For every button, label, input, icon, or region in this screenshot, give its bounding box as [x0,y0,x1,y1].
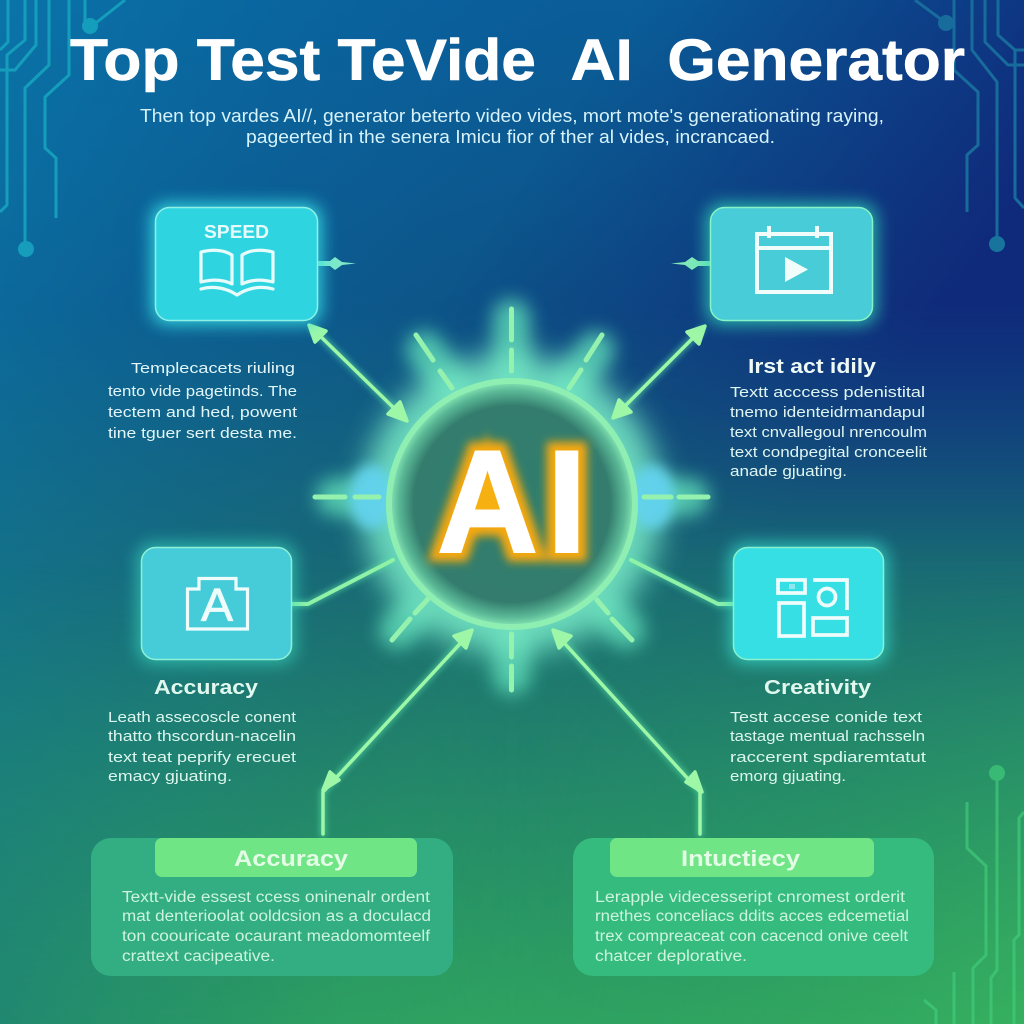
connector: creativity card to hub [631,560,733,604]
text block: accuracy description: emacy gjuating. [108,768,232,785]
circuit traces: top left [0,0,125,257]
label: speed: SPEED [204,222,269,242]
arrow: video to hub [613,326,705,418]
arrow: bottom left box to hub [323,630,472,834]
title: Top Test TeVide AI Generator [70,28,965,93]
text block: video description: text condpegital cronceelit [730,444,928,461]
text block: video description: Textt acccess pdenistital [730,384,925,401]
text block: creativity description [730,709,927,785]
card: speed [151,203,322,325]
heading: instant ability: Irst act idily [748,356,877,378]
panel header: intuitive: Intuctiecy [681,846,801,871]
arrow: speed to hub [309,325,407,421]
icon: framed letter A: A [201,579,233,631]
text block: accuracy description: text teat peprify erecuet [108,749,297,766]
panel header: accuracy [155,838,417,877]
hub outer glow [335,318,690,676]
text block: creativity description: tastage mentual rachsseln [730,728,925,745]
icon: open book [201,250,273,295]
panel text: accuracy: crattext cacipeative. [122,948,275,965]
text block: creativity description: emorg gjuating. [730,768,846,785]
panel text: intuitive: Lerapple videcesseript cnromest orderit [595,889,906,906]
panel text: intuitive: chatcer deplorative. [595,948,747,965]
card: accuracy icon [137,543,296,664]
subtitle: Then top vardes AI//, generator beterto video vides, mort mote's generationating raying, [140,106,884,126]
AI label: I [546,420,587,583]
text block: accuracy description: Leath assecoscle conent [108,709,297,726]
icon: layout blocks [778,580,847,636]
panel text: accuracy: Textt-vide essest ccess oninenalr ordent [122,889,431,906]
arrows and connectors [292,325,733,834]
heading: creativity: Creativity [764,677,872,699]
subtitle: pageerted in the senera Imicu fior of ther al vides, incrancaed. [246,127,775,147]
text block: speed description: tento vide pagetinds. The [108,383,297,400]
connector: accuracy card to hub [292,560,393,604]
panel text: accuracy [122,889,431,965]
card: creativity icon [729,543,888,664]
text block: video description: text cnvallegoul nrencoulm [730,424,927,441]
panel: intuitive summary [573,838,934,976]
panel text: intuitive: trex compreaceat con cacencd onive ceelt [595,928,909,945]
connector glow [292,329,733,834]
panel header: intuitive [610,838,874,877]
heading: accuracy: Accuracy [154,677,259,699]
rays [315,309,708,690]
AI label: A [437,420,538,583]
text block: speed description: tectem and hed, powent [108,404,298,421]
arrow: bottom right box to hub [553,630,702,834]
text block: speed description: tine tguer sert desta me. [108,425,297,442]
connector: speed card stub [318,257,356,270]
central AI hub [315,309,708,690]
card: video [706,203,877,325]
text block: accuracy description: thatto thscordun-nacelin [108,728,296,745]
connector: video card stub [671,257,710,270]
text block: creativity description: raccerent spdiaremtatut [730,749,927,766]
panel text: accuracy: ton coouricate ocaurant meadomomteelf [122,928,431,945]
text block: video description: anade gjuating. [730,463,847,480]
text block: creativity description: Testt accese conide text [730,709,923,726]
circuit traces: bottom right [924,765,1024,1024]
AI glow: A [437,420,538,583]
icon: calendar play [757,226,831,292]
text block: accuracy description [108,709,297,785]
hub disc [389,381,635,627]
panel text: intuitive: rnethes conceliacs ddits acces edcemetial [595,908,909,925]
text block: video description [730,384,928,480]
icon: framed letter A [188,578,248,631]
panel header: accuracy: Accuracy [234,846,349,871]
text block: video description: tnemo identeidrmandapul [730,404,925,421]
subtitle [140,106,884,147]
text block: speed description [108,360,298,442]
text block: speed description: Templecacets riuling [131,360,295,377]
panel text: accuracy: mat denterioolat ooldcsion as a doculacd [122,908,431,925]
circuit traces: top right [915,0,1024,252]
panel text: intuitive [595,889,909,965]
panel: accuracy summary [91,838,453,976]
AI glow: I [546,420,587,583]
